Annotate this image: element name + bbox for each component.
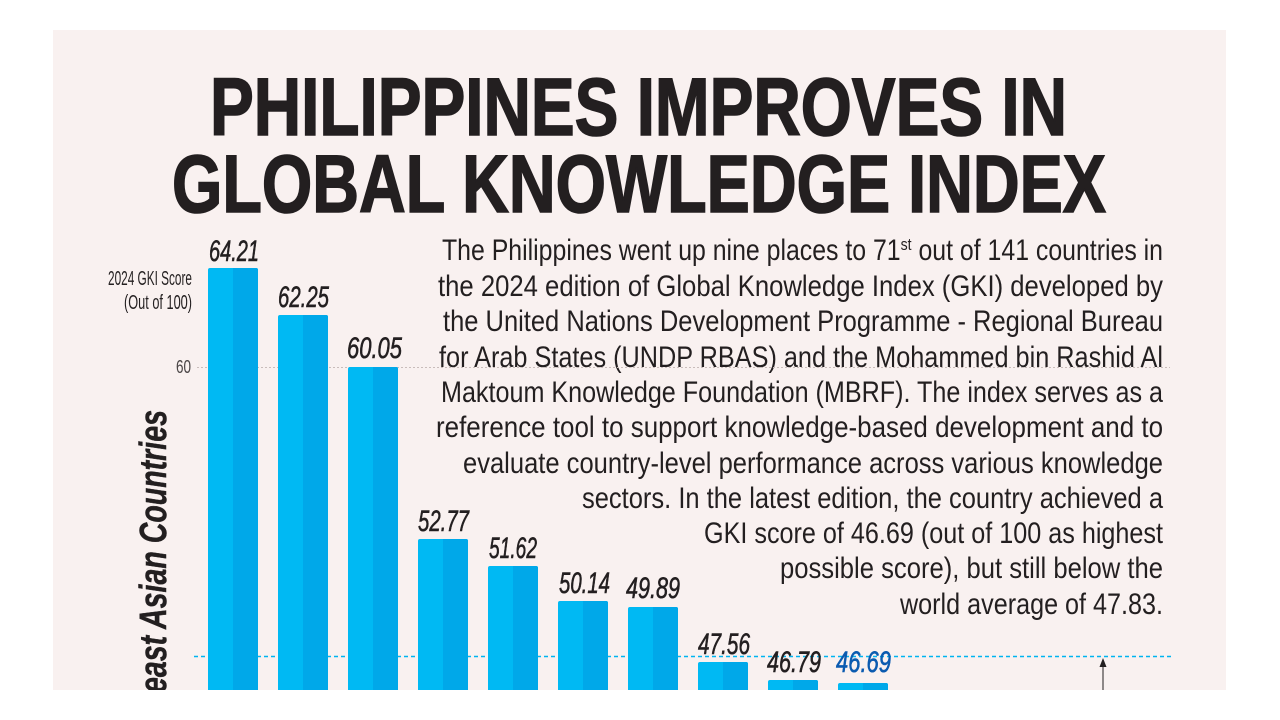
title — [172, 62, 1106, 230]
text block: description: The Philippines went up nine places to 71 — [442, 234, 996, 267]
bar value labels: 60.05 — [347, 332, 402, 365]
bar: 64.21 — [208, 268, 258, 698]
text block: description: sectors. In the latest edition, the country achieved a — [582, 482, 1163, 515]
text block: description: world average of 47.83. — [899, 588, 1163, 621]
bar value labels — [209, 235, 891, 679]
bar: 49.89 — [628, 607, 678, 698]
axis title: (Out of 100) — [124, 292, 192, 314]
gridline: 60 — [197, 366, 1170, 368]
text block: description: the 2024 edition of Global Knowledge Index (GKI) developed by — [438, 270, 1163, 303]
axis tick: 60: 60 — [176, 357, 191, 377]
text block: description: GKI score of 46.69 (out of 100 as highest — [704, 517, 1164, 550]
bar value labels: 46.79 — [767, 646, 821, 679]
bar value labels: 52.77 — [418, 505, 470, 538]
text block: description: possible score), but still below the — [780, 552, 1163, 585]
title: PHILIPPINES IMPROVES IN — [210, 62, 1067, 153]
axis title: 2024 GKI Score — [108, 268, 192, 290]
bar value labels: 50.14 — [559, 567, 610, 600]
axis title — [108, 268, 192, 314]
vertical axis label: east Asian Countries — [133, 410, 175, 693]
bar: 46.69 Philippines — [838, 683, 888, 690]
text block: description: out of 141 countries in — [912, 234, 1163, 267]
bar value labels: 64.21 — [209, 235, 259, 268]
bar chart — [208, 268, 888, 698]
bar value labels: 62.25 — [278, 281, 329, 314]
text block: description: Maktoum Knowledge Foundation (MBRF). The index serves as a — [441, 376, 1163, 409]
bar value labels: 51.62 — [489, 532, 537, 565]
bar value labels: 47.56 — [698, 628, 750, 661]
arrow: world average — [1100, 658, 1106, 690]
bar: 47.56 — [698, 662, 748, 690]
bar value labels: 46.69 — [836, 646, 891, 679]
text block: description — [436, 234, 1164, 621]
text block: description: reference tool to support knowledge-based development and to — [436, 411, 1163, 444]
bar value labels: 49.89 — [626, 572, 680, 605]
text block: description: for Arab States (UNDP RBAS) and the Mohammed bin Rashid Al — [439, 341, 1163, 374]
bar: 51.62 — [488, 566, 538, 698]
text block: description: evaluate country-level performance across various knowledge — [463, 447, 1163, 480]
world average line — [194, 656, 1171, 658]
bar: 52.77 — [418, 539, 468, 698]
text block: description: the United Nations Development Programme - Regional Bureau — [443, 305, 1163, 338]
bar: 46.79 — [768, 680, 818, 690]
text block: description: st — [901, 235, 912, 254]
bar: 60.05 — [348, 367, 398, 698]
bar: 50.14 — [558, 601, 608, 698]
bar: 62.25 — [278, 315, 328, 698]
